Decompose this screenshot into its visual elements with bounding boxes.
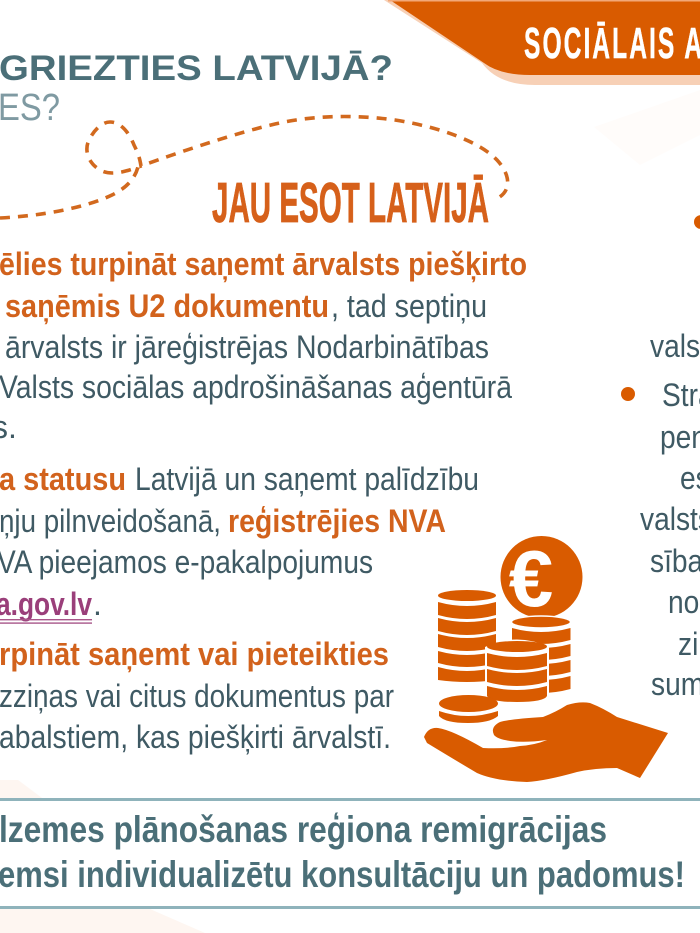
bullet [694,215,700,229]
paragraph: NVA registration: VA pieejamos e-pakalpojumus [0,544,373,580]
paragraph: NVA registration: ņju pilnveidošanā, [0,503,221,539]
paragraph: U2 document: , tad septiņu [331,288,487,324]
hand [424,702,668,782]
callout: regional consultation: lzemes plānošanas reģiona remigrācijas [0,809,607,850]
banner title: SOCIĀLAIS A [524,19,700,68]
single coin [439,695,498,723]
paragraph: NVA registration: a statusu [0,461,126,497]
euro coin: € [509,534,553,623]
heading: return to Latvia: GRIEZTIES LATVIJĀ? [0,49,393,88]
paragraph: U2 document: ārvalsts ir jāreģistrējas Nodarbinātības [5,329,489,365]
paragraph: U2 document [0,246,527,445]
paragraph: foreign benefits: rpināt saņemt vai pieteikties [0,636,389,672]
paragraph: NVA registration: . [93,586,102,622]
heading: return to Latvia: ES? [0,87,60,129]
paragraph: foreign benefits [0,636,394,755]
banner: social aspects [384,0,700,85]
paragraph: NVA registration: Latvijā un saņemt palīdzību [135,461,479,497]
icon: hand holding euro coins [424,534,668,782]
paragraph: foreign benefits: abalstiem, kas piešķirti ārvalstī. [0,719,391,755]
paragraph: NVA registration: reģistrējies NVA [228,503,446,539]
panel: right text column: no [668,585,699,620]
paragraph: NVA registration [0,461,479,624]
heading: return to Latvia [0,49,393,129]
callout: regional consultation [0,798,700,909]
paragraph: U2 document: Valsts sociālas apdrošināšanas aģentūrā [0,369,512,405]
bullet [621,387,635,401]
paragraph: U2 document: ēlies turpināt saņemt ārvalsts piešķirto [0,246,527,282]
dashed route line [0,117,508,218]
panel: left text column [0,246,527,755]
paragraph: U2 document: saņēmis U2 dokumentu [5,288,329,324]
paragraph: foreign benefits: zziņas vai citus dokumentus par [0,678,394,714]
euro coin [500,534,582,623]
back coin stack [512,616,570,693]
left coin stack [438,590,496,682]
front coin stack [485,640,549,704]
panel: right text column: zi [678,627,698,662]
panel: right text column [621,215,700,702]
